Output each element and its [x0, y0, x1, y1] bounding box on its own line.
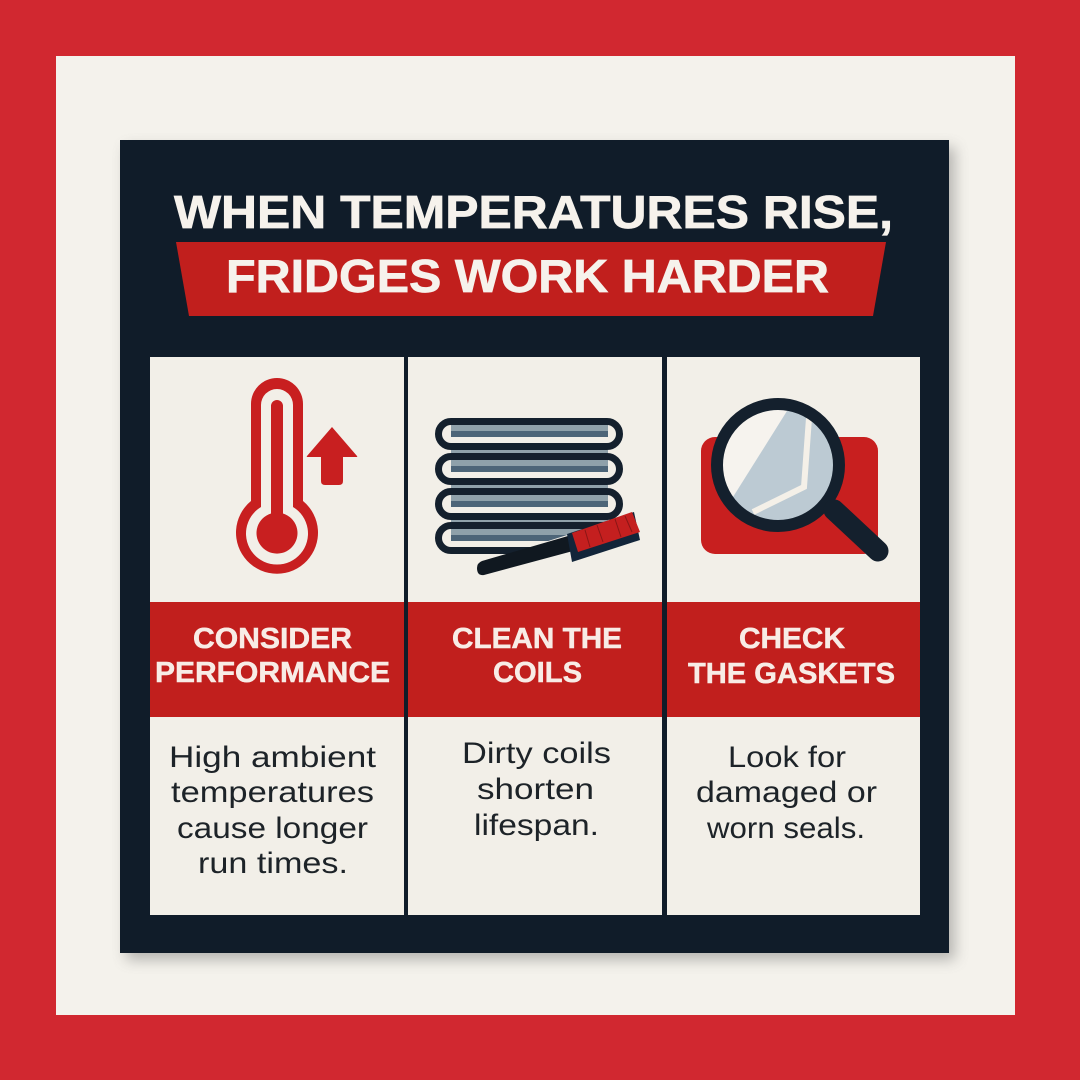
description: lifespan.: [474, 809, 599, 842]
panel: clean the coils: [408, 357, 662, 915]
navy panel shadow: [126, 147, 955, 960]
heading band: CLEAN THE: [452, 623, 622, 655]
heading band: [667, 602, 920, 717]
icon: thermometer with up arrow: [236, 378, 357, 574]
main navy card: [120, 140, 949, 953]
heading band: [408, 602, 662, 717]
description: run times.: [198, 847, 348, 880]
icon: coils and brush: [438, 422, 645, 575]
description: damaged or: [696, 776, 877, 809]
heading band: CONSIDER: [193, 623, 352, 655]
title line one: WHEN TEMPERATURES RISE,: [174, 186, 893, 238]
icon: magnifier over gasket: [701, 404, 878, 554]
description: [169, 741, 377, 880]
title line two: FRIDGES WORK HARDER: [226, 250, 829, 302]
description: High ambient: [169, 741, 377, 774]
title banner: [176, 242, 886, 316]
panel: consider performance: [150, 357, 404, 915]
description: Look for: [728, 741, 846, 774]
panel: check the gaskets: [667, 357, 920, 915]
description: cause longer: [177, 812, 368, 845]
description: temperatures: [171, 776, 374, 809]
heading band: PERFORMANCE: [155, 657, 390, 689]
description: [462, 737, 611, 842]
inner cream frame: [56, 56, 1015, 1015]
description: worn seals.: [706, 812, 865, 845]
heading band: COILS: [493, 657, 582, 689]
heading band: [150, 602, 404, 717]
description: shorten: [477, 773, 594, 806]
heading band: THE GASKETS: [688, 658, 895, 690]
description: [696, 741, 877, 845]
description: Dirty coils: [462, 737, 611, 770]
heading band: CHECK: [739, 623, 845, 655]
